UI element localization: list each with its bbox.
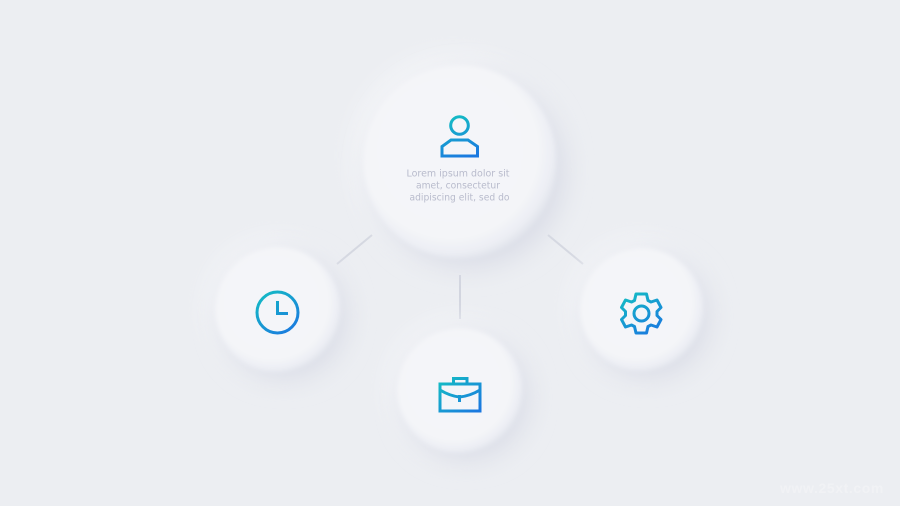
watermark: www.25xt.com (779, 480, 884, 496)
text: main description: adipiscing elit, sed do (410, 192, 510, 204)
circle: gear (575, 243, 710, 378)
connector: centre to clock (337, 235, 372, 264)
text: main description: amet, consectetur (416, 180, 500, 192)
connector: centre to gear (548, 235, 583, 264)
circle: briefcase (392, 323, 529, 460)
icon: gear (622, 294, 661, 333)
icon: briefcase (440, 378, 480, 411)
icon: person (442, 117, 478, 156)
circle: clock (210, 242, 347, 379)
text: main description: Lorem ipsum dolor sit (406, 168, 510, 180)
icon: clock (257, 292, 298, 333)
main circle: person (356, 58, 565, 267)
connector: centre to briefcase (459, 275, 461, 319)
